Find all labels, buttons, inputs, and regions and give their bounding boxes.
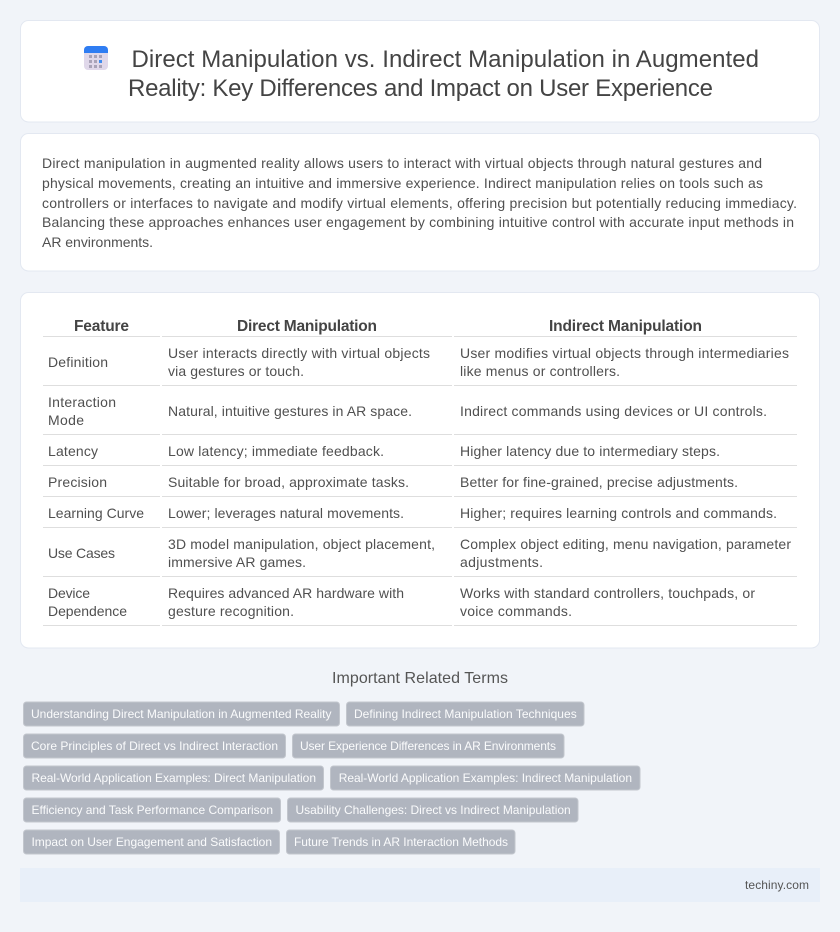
tag: future trends: Future Trends in AR Interaction Methods bbox=[294, 835, 508, 849]
tag: examples direct bbox=[24, 766, 324, 790]
tag: examples indirect bbox=[330, 766, 640, 790]
tag: efficiency: Efficiency and Task Performance Comparison bbox=[32, 803, 273, 817]
text block: introduction paragraph: Direct manipulation in augmented reality allows users to interact with virtual objects through natural gestures and bbox=[42, 155, 762, 171]
row: use cases: Use Cases bbox=[48, 545, 115, 561]
icon: calendar bbox=[84, 46, 108, 70]
tag: efficiency bbox=[24, 798, 280, 822]
row: precision: Better for fine-grained, precise adjustments. bbox=[460, 474, 738, 490]
title bbox=[128, 46, 759, 102]
row: interaction mode: Indirect commands using devices or UI controls. bbox=[460, 403, 767, 419]
row: definition: User interacts directly with virtual objects bbox=[168, 345, 430, 361]
title: Reality: Key Differences and Impact on User Experience bbox=[128, 75, 713, 102]
row: device dependence: voice commands. bbox=[460, 603, 572, 619]
tag: future trends bbox=[286, 830, 515, 854]
row: interaction mode: Natural, intuitive gestures in AR space. bbox=[168, 403, 412, 419]
tag: core principles: Core Principles of Direct vs Indirect Interaction bbox=[31, 739, 278, 753]
row: latency: Low latency; immediate feedback. bbox=[168, 443, 384, 459]
tag: usability challenges bbox=[288, 798, 578, 822]
tag: user experience differences bbox=[292, 734, 564, 758]
row: learning curve bbox=[48, 505, 777, 521]
row: definition: User modifies virtual objects through intermediaries bbox=[460, 345, 789, 361]
table header row: Direct Manipulation bbox=[237, 318, 377, 335]
tag: usability challenges: Usability Challenges: Direct vs Indirect Manipulation bbox=[296, 803, 571, 817]
panel: introduction bbox=[20, 134, 820, 271]
row: interaction mode bbox=[48, 394, 767, 428]
row: device dependence: Requires advanced AR hardware with bbox=[168, 585, 404, 601]
row: interaction mode: Interaction bbox=[48, 394, 116, 410]
footer: techiny.com bbox=[745, 878, 809, 892]
row: device dependence: Dependence bbox=[48, 603, 127, 619]
row: device dependence: gesture recognition. bbox=[168, 603, 294, 619]
row: definition: via gestures or touch. bbox=[168, 363, 304, 379]
row: use cases bbox=[48, 536, 791, 570]
text block: introduction paragraph: controllers or interfaces to navigate and modify virtual elements, offering precision but potentially reducing immediacy. bbox=[42, 195, 797, 211]
text block: introduction paragraph: AR environments. bbox=[42, 234, 153, 250]
row: use cases: Complex object editing, menu navigation, parameter bbox=[460, 536, 791, 552]
tag: examples indirect: Real-World Application Examples: Indirect Manipulation bbox=[339, 771, 632, 785]
text block: introduction paragraph bbox=[42, 155, 797, 250]
row: precision: Precision bbox=[48, 474, 107, 490]
table header row: Feature bbox=[74, 318, 129, 335]
text block: introduction paragraph: physical movements, creating an intuitive and immersive experience. Indirect manipulation relies on tools such as bbox=[42, 175, 763, 191]
row: device dependence bbox=[48, 585, 755, 619]
row: definition: like menus or controllers. bbox=[460, 363, 620, 379]
title: Direct Manipulation vs. Indirect Manipulation in Augmented bbox=[132, 46, 759, 73]
table header row: Indirect Manipulation bbox=[549, 318, 702, 335]
row: interaction mode: Mode bbox=[48, 412, 84, 428]
row: learning curve: Lower; leverages natural movements. bbox=[168, 505, 404, 521]
tag: defining indirect manipulation bbox=[346, 702, 584, 726]
row: precision bbox=[48, 474, 738, 490]
row: precision: Suitable for broad, approximate tasks. bbox=[168, 474, 409, 490]
row: latency: Higher latency due to intermediary steps. bbox=[460, 443, 720, 459]
heading: important related terms: Important Related Terms bbox=[332, 670, 508, 687]
tag: user experience differences: User Experience Differences in AR Environments bbox=[300, 739, 556, 753]
row: latency: Latency bbox=[48, 443, 98, 459]
row: definition: Definition bbox=[48, 354, 108, 370]
row: use cases: adjustments. bbox=[460, 554, 543, 570]
table header row bbox=[74, 318, 702, 335]
row: device dependence: Works with standard controllers, touchpads, or bbox=[460, 585, 755, 601]
row: device dependence: Device bbox=[48, 585, 90, 601]
panel: header bbox=[20, 20, 820, 122]
row: learning curve: Learning Curve bbox=[48, 505, 144, 521]
tag: examples direct: Real-World Application Examples: Direct Manipulation bbox=[32, 771, 316, 785]
text block: introduction paragraph: Balancing these approaches enhances user engagement by combining intuitive control with accurate input methods in bbox=[42, 214, 794, 230]
row: latency bbox=[48, 443, 720, 459]
tag: defining indirect manipulation: Defining Indirect Manipulation Techniques bbox=[354, 707, 577, 721]
tag: impact on engagement bbox=[24, 830, 280, 854]
row: use cases: 3D model manipulation, object placement, bbox=[168, 536, 435, 552]
tag: core principles bbox=[24, 734, 286, 758]
row: use cases: immersive AR games. bbox=[168, 554, 306, 570]
row: definition bbox=[48, 345, 789, 379]
tag: understanding direct manipulation: Understanding Direct Manipulation in Augmented Reality bbox=[31, 707, 332, 721]
tag group: related terms bbox=[24, 702, 640, 854]
footer bbox=[20, 868, 820, 902]
tag: impact on engagement: Impact on User Engagement and Satisfaction bbox=[32, 835, 272, 849]
tag: understanding direct manipulation bbox=[24, 702, 340, 726]
panel: comparison table bbox=[20, 292, 820, 648]
row: learning curve: Higher; requires learning controls and commands. bbox=[460, 505, 777, 521]
